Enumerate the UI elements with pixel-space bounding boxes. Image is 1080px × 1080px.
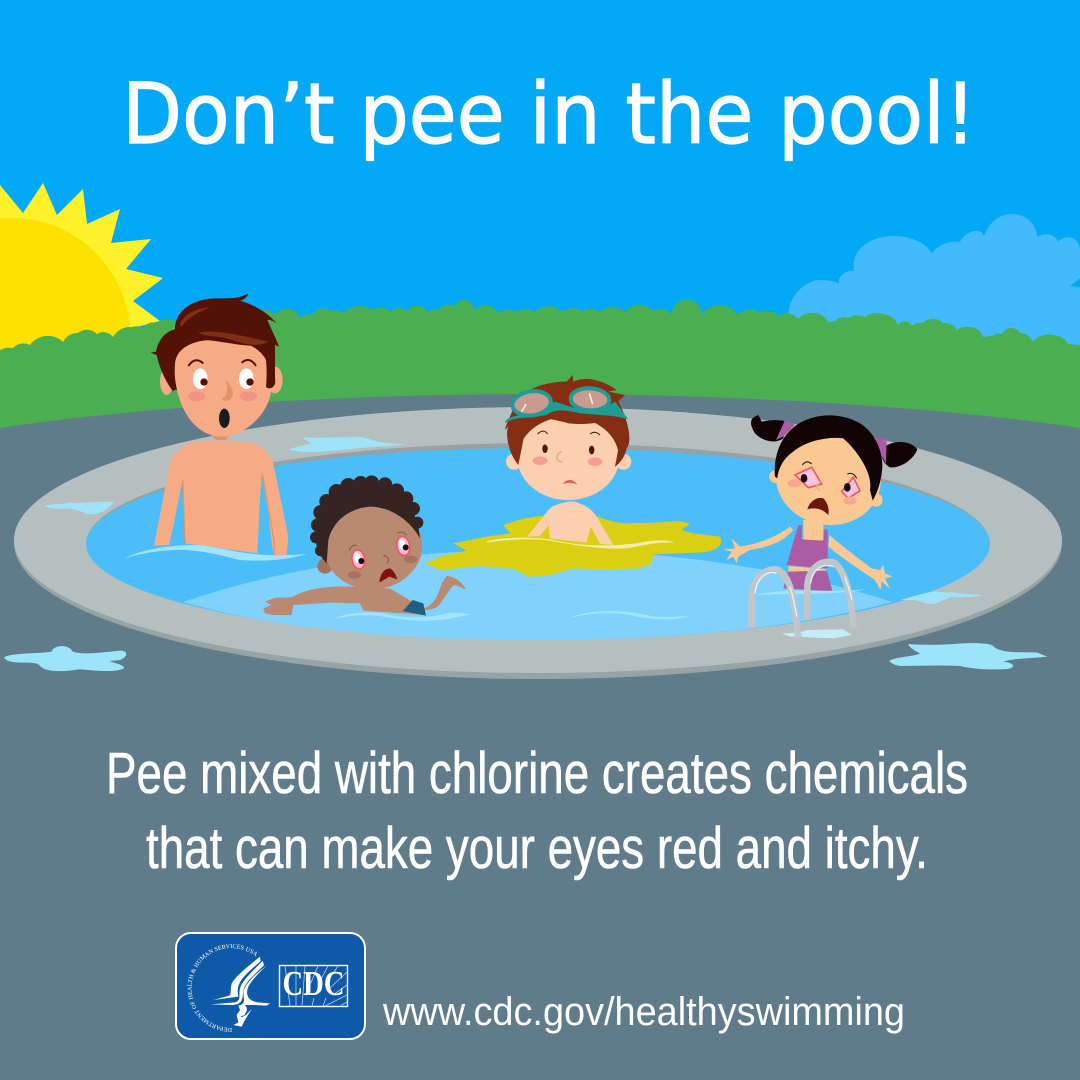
ripple at ladder — [757, 589, 867, 595]
boy with goggles — [505, 375, 631, 545]
cheeks — [788, 479, 801, 487]
deck puddle left — [4, 646, 126, 671]
ground — [0, 394, 1080, 1080]
deck puddle right — [889, 643, 1047, 669]
CDC mark: CDC — [282, 964, 344, 1003]
mouth — [219, 409, 230, 428]
swimsuit — [787, 525, 828, 568]
ripple over puddle — [487, 538, 675, 549]
cheeks — [348, 571, 361, 579]
hedge — [0, 299, 1080, 440]
nose — [817, 482, 821, 491]
ladder puddle — [782, 629, 852, 638]
mouth — [379, 568, 397, 583]
goggles — [505, 387, 628, 423]
cheeks — [533, 456, 547, 465]
ears — [769, 470, 782, 483]
hair — [505, 375, 629, 467]
rim puddle top — [288, 437, 407, 452]
hair — [151, 293, 279, 392]
back hair — [515, 390, 620, 467]
arms — [723, 527, 793, 563]
back hair — [173, 313, 273, 390]
icon: sun — [0, 183, 163, 454]
pool water — [86, 448, 990, 640]
hair — [310, 475, 423, 563]
title: Don’t pee in the pool! — [122, 65, 976, 163]
face — [518, 417, 619, 500]
shallow water — [183, 550, 892, 640]
water ripple right — [568, 611, 690, 620]
nose — [222, 379, 233, 401]
cheeks — [188, 391, 205, 401]
website URL: www.cdc.gov/healthyswimming — [382, 990, 905, 1034]
pigtails — [751, 415, 787, 441]
urine puddle — [425, 516, 721, 577]
neck — [803, 520, 823, 542]
face — [320, 499, 427, 594]
nose — [383, 555, 389, 563]
ladder rails — [752, 562, 853, 637]
CDC logo badge — [175, 932, 366, 1040]
ripple under boy — [335, 612, 470, 621]
ears — [160, 368, 173, 395]
torso — [527, 502, 613, 545]
nose — [557, 452, 563, 462]
boy with curly hair — [263, 475, 466, 616]
eyes — [193, 368, 208, 389]
water ripple — [124, 545, 307, 561]
pool ladder — [752, 562, 867, 641]
girl character — [723, 415, 917, 592]
face — [174, 339, 272, 437]
cloud — [788, 214, 1080, 367]
eyes — [350, 549, 366, 570]
eyes — [542, 444, 548, 453]
ladder bases — [792, 636, 805, 641]
icon: HHS eagle: DEPARTMENT OF HEALTH & HUMAN SERVICES USA — [188, 944, 257, 1032]
mouth — [563, 480, 577, 485]
ears — [506, 454, 522, 470]
face — [768, 423, 888, 533]
arms and body — [263, 576, 466, 615]
rim puddle left — [45, 502, 114, 514]
panel: pool — [14, 407, 1062, 679]
hair — [775, 415, 882, 501]
body text — [106, 741, 968, 881]
rim puddle right — [901, 592, 982, 604]
eyes — [795, 467, 822, 488]
mouth — [807, 498, 829, 515]
pool rim — [14, 407, 1062, 679]
neck — [212, 435, 229, 440]
swim trunks — [403, 600, 426, 616]
bows — [776, 420, 887, 463]
ear — [317, 558, 333, 574]
torso and arms — [154, 441, 288, 555]
man character — [151, 293, 288, 555]
